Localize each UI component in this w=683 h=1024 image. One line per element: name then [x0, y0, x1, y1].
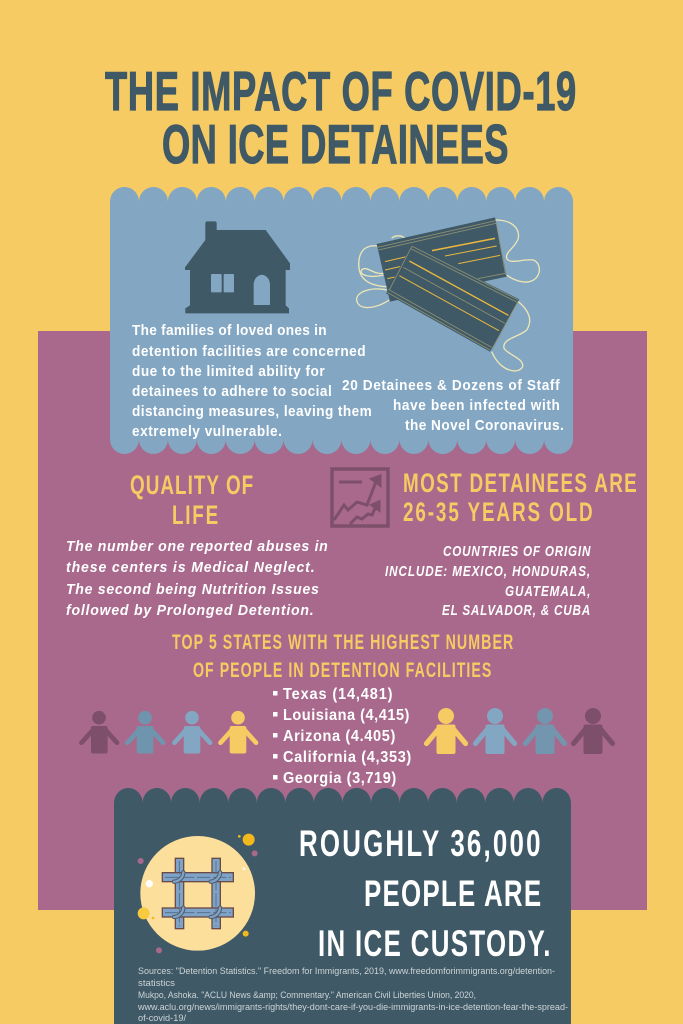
text: countries of origin: GUATEMALA,	[505, 583, 590, 599]
list: top 5 states: Texas (14,481)	[283, 686, 393, 703]
text: sources: Mukpo, Ashoka. "ACLU News &amp; Commentary." American Civil Liberties Union, 2020,	[138, 990, 476, 1000]
text: sources: statistics	[138, 978, 176, 988]
icon: people row right	[426, 708, 612, 754]
list: top 5 states	[273, 686, 411, 787]
heading: top 5 states: OF PEOPLE IN DETENTION FACILITIES	[193, 658, 491, 682]
text: families concern: due to the limited ability for	[132, 363, 325, 379]
heading: most detainees age: MOST DETAINEES ARE	[403, 468, 637, 498]
heading: most detainees age: 26-35 YEARS OLD	[403, 497, 593, 527]
text: custody headline: PEOPLE ARE	[364, 872, 541, 914]
panel: families and infections	[110, 187, 573, 454]
text: quality of life body	[66, 539, 328, 619]
text: families concern: extremely vulnerable.	[132, 423, 282, 439]
text: families concern: The families of loved ones in	[132, 322, 327, 338]
text: custody headline: IN ICE CUSTODY.	[318, 922, 550, 964]
text: quality of life body: The second being Nutrition Issues	[66, 582, 319, 598]
panel: custody	[114, 788, 571, 1024]
text: infection count: have been infected with	[393, 397, 560, 413]
title: ON ICE DETAINEES	[162, 113, 509, 175]
panel: purple background	[38, 331, 647, 910]
title	[105, 60, 576, 175]
text: sources	[137, 966, 568, 1023]
icon: jail bars	[138, 834, 258, 953]
text: families concern: detention facilities are concerned	[132, 343, 366, 359]
text: sources: Sources: "Detention Statistics." Freedom for Immigrants, 2019, www.freedomforimmigrants.org/detention-	[138, 966, 555, 976]
text: custody headline	[299, 822, 550, 964]
text: infection count	[342, 377, 564, 433]
text: infection count: 20 Detainees & Dozens of Staff	[342, 377, 560, 393]
heading: most detainees age	[403, 468, 637, 527]
text: sources: of-covid-19/	[138, 1013, 186, 1023]
icon: growth chart	[332, 469, 388, 526]
text: quality of life body: followed by Prolonged Detention.	[66, 603, 314, 619]
heading: quality of life	[130, 470, 253, 530]
text: countries of origin: COUNTRIES OF ORIGIN	[443, 543, 591, 559]
list: top 5 states: Arizona (4.405)	[283, 728, 395, 745]
title: THE IMPACT OF COVID-19	[105, 60, 576, 122]
text: quality of life body: these centers is Medical Neglect.	[66, 560, 315, 576]
heading: quality of life: QUALITY OF	[130, 470, 253, 500]
text: custody headline: ROUGHLY 36,000	[299, 822, 540, 864]
heading: top 5 states: TOP 5 STATES WITH THE HIGHEST NUMBER	[172, 630, 513, 654]
text: families concern: distancing measures, leaving them	[132, 403, 372, 419]
heading: top 5 states	[172, 630, 513, 682]
list: top 5 states: Louisiana (4,415)	[283, 707, 409, 724]
text: families concern	[132, 322, 372, 439]
text: infection count: the Novel Coronavirus.	[405, 417, 564, 433]
text: families concern: detainees to adhere to social	[132, 383, 332, 399]
icon: people row left	[82, 711, 256, 754]
heading: quality of life: LIFE	[172, 500, 218, 530]
icon: house	[185, 221, 290, 313]
text: quality of life body: The number one reported abuses in	[66, 539, 328, 555]
text: countries of origin: INCLUDE: MEXICO, HONDURAS,	[385, 563, 590, 579]
text: sources: www.aclu.org/news/immigrants-rights/they-dont-care-if-you-die-immigrants-in-ice-detention-fear-the-spread-	[137, 1002, 568, 1012]
text: countries of origin: EL SALVADOR, & CUBA	[442, 602, 590, 618]
list: top 5 states: Georgia (3,719)	[283, 770, 396, 787]
text: countries of origin	[385, 543, 591, 618]
icon: face masks	[357, 217, 539, 371]
list: top 5 states: California (4,353)	[283, 749, 411, 766]
